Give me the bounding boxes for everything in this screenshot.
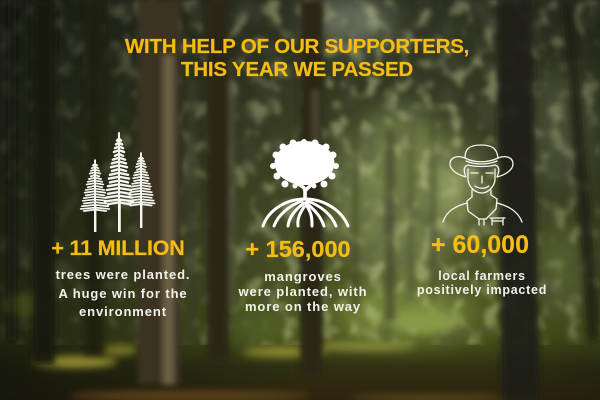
- title: WITH HELP OF OUR SUPPORTERS,: [125, 35, 469, 58]
- stat: 156,000: + 156,000: [245, 236, 351, 262]
- stat: 60,000: + 60,000: [431, 231, 529, 259]
- text: trees: A huge win for the: [58, 286, 188, 300]
- text: farmers: [417, 269, 547, 297]
- text: mangroves: were planted, with: [239, 284, 367, 299]
- icon: farmer with hat: [442, 144, 523, 226]
- text: mangroves: more on the way: [245, 299, 361, 314]
- icon: three pine trees: [80, 132, 156, 232]
- icon: mangrove tree: [262, 139, 350, 228]
- text: farmers: local farmers: [438, 269, 526, 283]
- text: trees: [56, 267, 190, 319]
- text: mangroves: mangroves: [264, 269, 342, 284]
- text: farmers: positively impacted: [417, 283, 547, 297]
- stat: 11 million: + 11 MILLION: [51, 236, 185, 260]
- text: trees: environment: [79, 304, 167, 319]
- text: mangroves: [238, 269, 367, 314]
- title: THIS YEAR WE PASSED: [181, 58, 413, 81]
- title: [124, 35, 469, 81]
- text: trees: trees were planted.: [56, 267, 190, 282]
